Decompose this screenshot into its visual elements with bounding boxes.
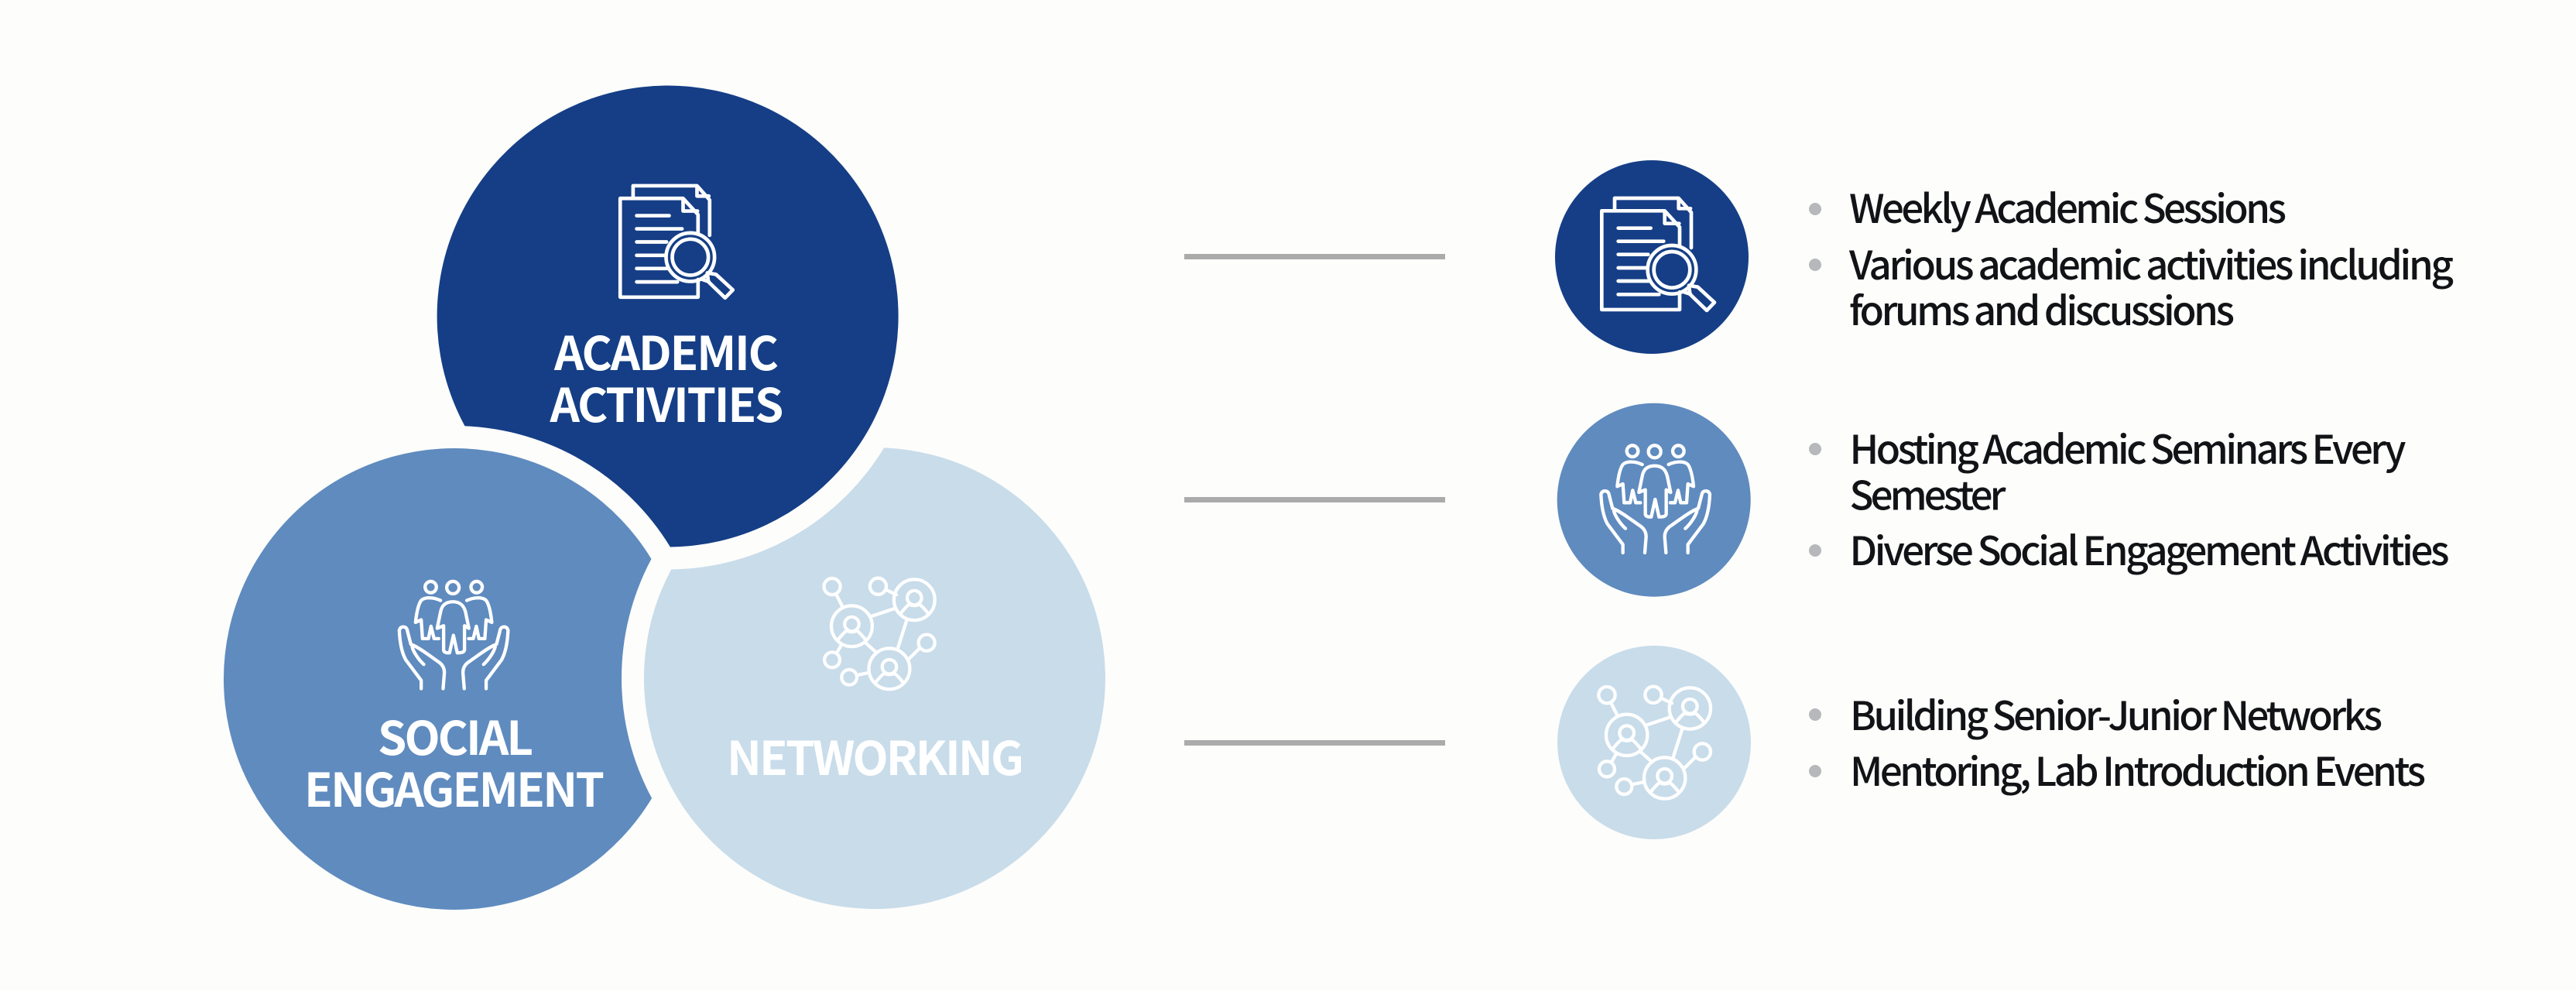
panel: venn diagram: [224, 86, 1105, 910]
bullet list: networking: Mentoring, Lab Introduction Events: [1850, 740, 2426, 797]
label: social engagement: SOCIAL: [378, 701, 533, 769]
connector line: social: [1184, 497, 1445, 502]
bullet list: academic: Various academic activities including: [1848, 234, 2454, 291]
circle: networking: [644, 447, 1105, 909]
connector line: academic: [1184, 254, 1445, 259]
bullet list: social: Hosting Academic Seminars Every: [1850, 418, 2406, 475]
label: networking: NETWORKING: [727, 722, 1024, 789]
badge: social icon: [1557, 403, 1751, 597]
circle: social engagement: [224, 448, 652, 910]
label: social engagement: ENGAGEMENT: [304, 753, 605, 821]
label: academic activities: ACADEMIC: [553, 317, 779, 384]
badge: networking icon: [1557, 646, 1751, 839]
row: networking details: [1557, 646, 2426, 839]
label: academic activities: [550, 317, 783, 436]
bullet list: networking: Building Senior-Junior Networks: [1850, 684, 2382, 742]
bullet list: social: [1809, 418, 2449, 577]
bullet list: networking: [1809, 684, 2426, 797]
bullet list: social: Diverse Social Engagement Activities: [1850, 520, 2449, 577]
icon: connected people network: [824, 578, 935, 689]
circle: academic activities: [437, 86, 899, 547]
bullet list: academic: [1809, 177, 2454, 337]
icon: people in hands: [399, 581, 508, 688]
bullet list: academic: forums and discussions: [1849, 279, 2235, 337]
icon: document with magnifier: [620, 186, 733, 298]
badge: academic icon: [1555, 160, 1749, 354]
row: academic details: [1555, 160, 2454, 354]
label: academic activities: ACTIVITIES: [550, 369, 783, 436]
bullet list: social: Semester: [1850, 465, 2006, 522]
connector line: networking: [1184, 740, 1445, 746]
label: social engagement: [304, 701, 605, 821]
bullet list: academic: Weekly Academic Sessions: [1849, 177, 2287, 235]
row: social details: [1557, 403, 2449, 597]
